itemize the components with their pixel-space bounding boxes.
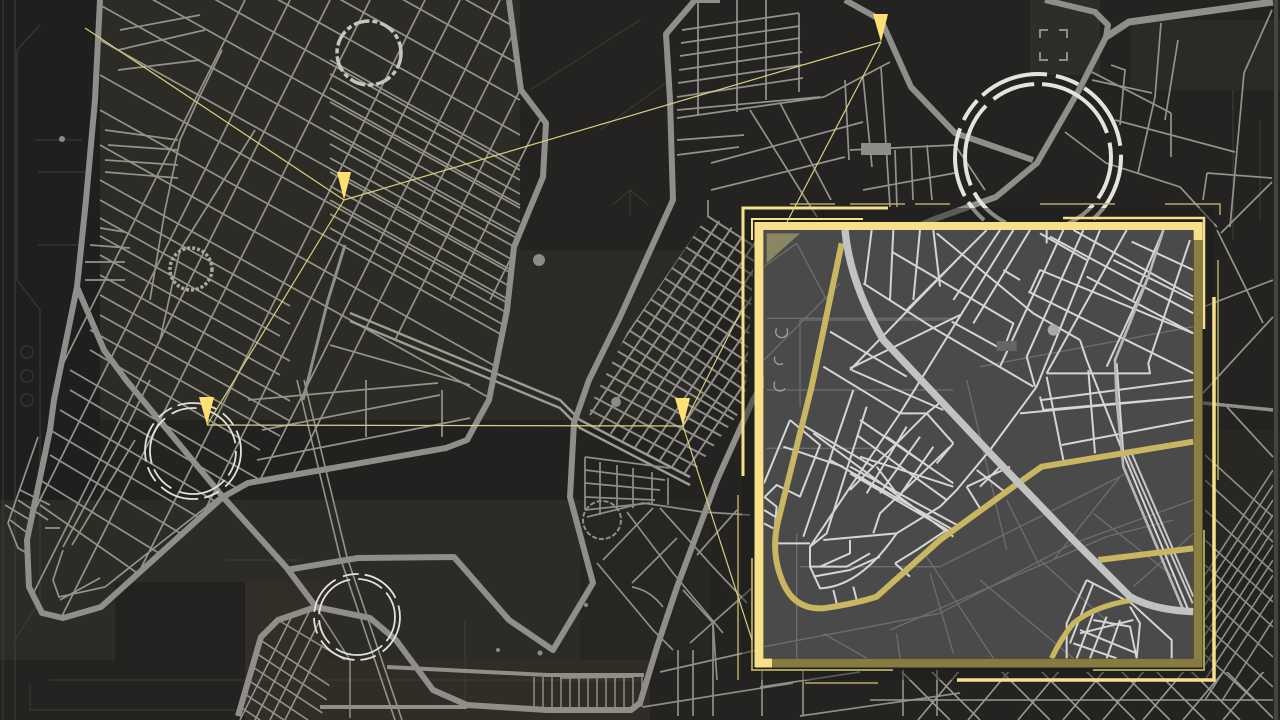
streets: south-west grid [239, 612, 330, 720]
dashed circle: top [337, 21, 401, 85]
inset shadow [742, 208, 1214, 680]
dashed circle: large right [955, 74, 1121, 240]
streets: central district [589, 216, 754, 474]
HUD dots [59, 136, 621, 656]
inset outer brackets [743, 208, 1214, 680]
streets: west district [34, 0, 540, 615]
location markers [199, 14, 888, 426]
inset background [764, 230, 1193, 658]
bottom ticks [278, 607, 642, 718]
inset frame accent lines [738, 204, 1220, 683]
panel: inset map [764, 230, 1193, 658]
inset roads [764, 230, 1193, 658]
streets: central south block [585, 200, 750, 517]
inset frame [755, 222, 1202, 667]
streets: south-east grid [1205, 455, 1273, 717]
dashed circle: bottom [314, 574, 400, 660]
patch marker [861, 143, 891, 155]
dashed circle: centre [583, 501, 621, 539]
dashed circle: left [170, 248, 212, 290]
connector lines [85, 28, 881, 640]
streets: lower central district [560, 508, 960, 716]
streets: bottom grid [870, 670, 1273, 720]
streets: northern district [677, 0, 1273, 457]
streets: central avenues and bridge bundle [5, 245, 690, 720]
HUD target brackets [1040, 30, 1067, 60]
dashed circle: lower left [145, 403, 241, 499]
